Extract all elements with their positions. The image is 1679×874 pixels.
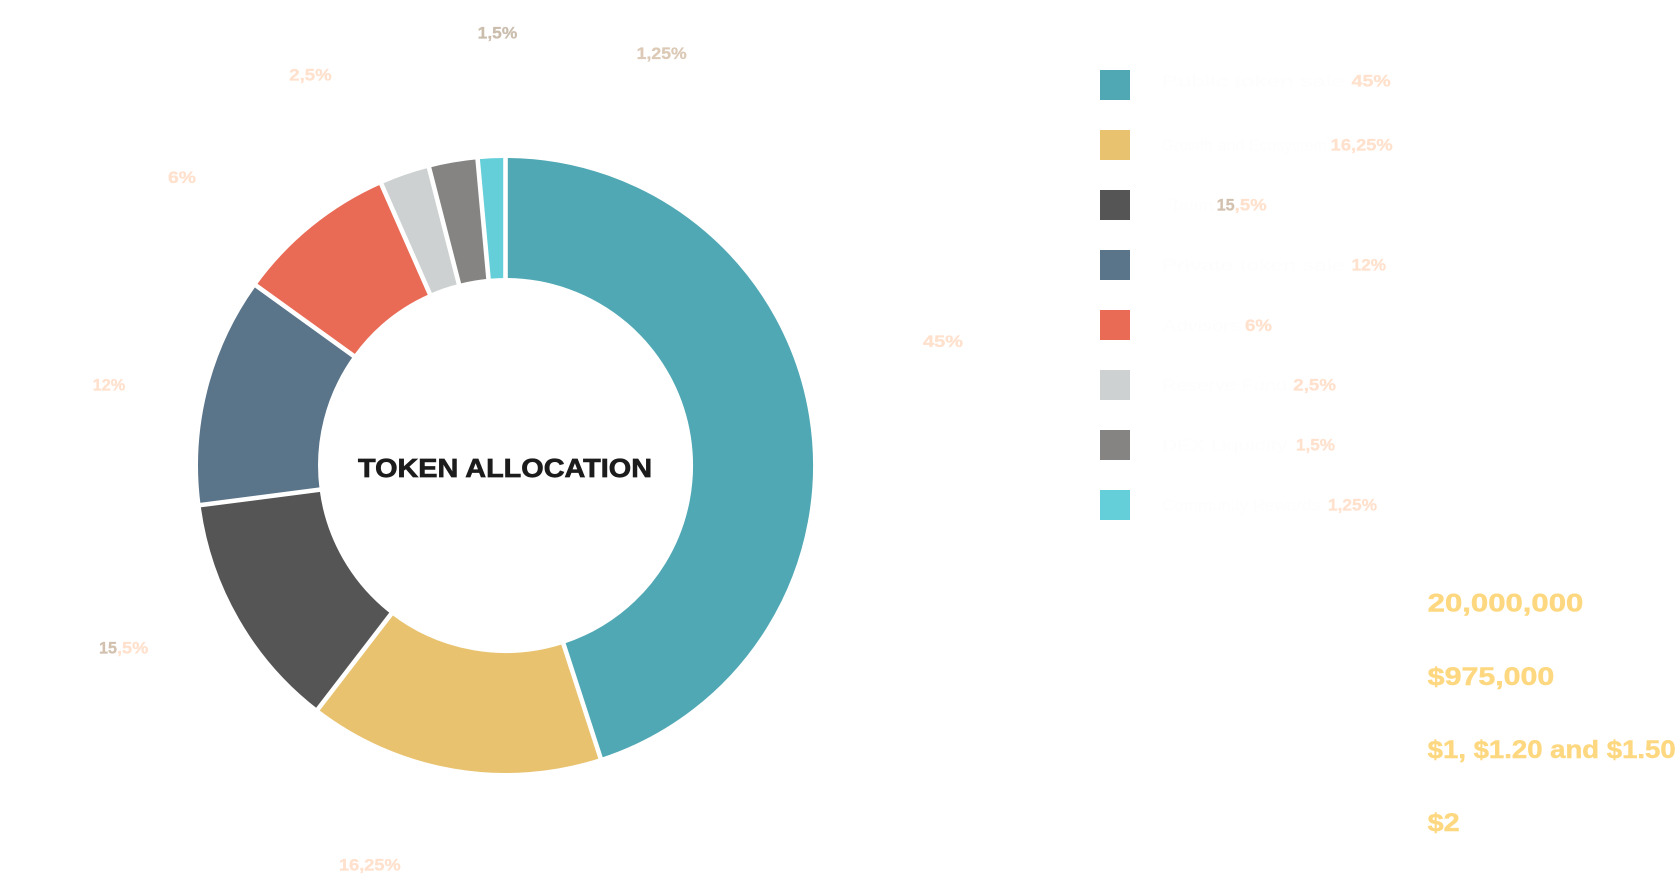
legend row: 2,5%: 2,5% bbox=[1293, 376, 1336, 395]
segment: 6% red bbox=[305, 239, 406, 321]
legend row: 1,25%: 1,25% bbox=[1328, 496, 1377, 515]
legend row: 15,5%: 15 bbox=[1217, 196, 1235, 215]
figure: 20,000,000: 20,000,000 bbox=[1428, 590, 1583, 618]
segment: 1,25% cyan bbox=[483, 218, 506, 219]
legend row: 1,5% bbox=[1100, 430, 1335, 460]
segment: 15,5% dark grey bbox=[260, 497, 354, 662]
legend row: 12%: Private token sale bbox=[1162, 258, 1345, 275]
callout: 6%: 6% bbox=[168, 168, 196, 187]
legend bbox=[1100, 70, 1393, 520]
legend row: 15,5% bbox=[1100, 190, 1267, 220]
legend row: 6%: 6% bbox=[1245, 316, 1272, 335]
legend row: 45%: 45% bbox=[1352, 72, 1391, 91]
donut callout labels bbox=[93, 23, 963, 874]
legend row: 16,25%: Growth and Ecosystem bbox=[1162, 138, 1327, 155]
legend row: 12%: 12% bbox=[1352, 256, 1386, 275]
callout: 1,25%: 1,25% bbox=[637, 44, 687, 63]
token sale key figures bbox=[1428, 590, 1676, 837]
callout: 15,5% bbox=[99, 638, 148, 657]
segment: 2,5% light grey bbox=[406, 226, 444, 239]
legend row: 6% bbox=[1100, 310, 1272, 340]
legend row: 1,25% bbox=[1100, 490, 1377, 520]
legend row: 45%: Public token sale bbox=[1162, 74, 1345, 91]
segment: 16,25% yellow bbox=[354, 662, 582, 713]
callout: 2,5%: 2,5% bbox=[289, 66, 332, 85]
legend row: 12% bbox=[1100, 250, 1386, 280]
figure: prices: $1, $1.20 and $1.50 bbox=[1428, 736, 1676, 764]
legend row: 1,5%: 1,5% bbox=[1296, 436, 1335, 455]
callout: 15,5%: 15 bbox=[99, 638, 117, 657]
callout: 45%: 45% bbox=[923, 332, 963, 351]
segment: 12% slate blue bbox=[258, 321, 305, 497]
callout: 1,5%: 1,5% bbox=[478, 23, 517, 42]
legend row: 6%: Advisors bbox=[1163, 318, 1240, 335]
segment: 45% teal bbox=[506, 218, 753, 701]
figure: $975,000: $975,000 bbox=[1428, 663, 1554, 691]
legend row: 2,5% bbox=[1100, 370, 1336, 400]
donut centre title: TOKEN ALLOCATION bbox=[358, 453, 652, 483]
figure: $2: $2 bbox=[1428, 809, 1460, 837]
legend row: 15,5%: Team bbox=[1170, 198, 1213, 215]
donut chart bbox=[198, 150, 753, 760]
segment: 1,5% grey bbox=[444, 219, 483, 226]
callout: 12%: 12% bbox=[93, 376, 125, 395]
legend row: 1,5%: DEX Liquidity bbox=[1162, 438, 1287, 455]
legend row: 1,25%: Community Rewards bbox=[1162, 498, 1320, 515]
legend row: 2,5%: Reserve Fund bbox=[1162, 378, 1287, 395]
legend row: 15,5%: ,5% bbox=[1235, 196, 1267, 215]
callout: 15,5%: ,5% bbox=[117, 638, 148, 657]
legend row: 16,25% bbox=[1100, 130, 1393, 160]
legend row: 16,25%: 16,25% bbox=[1331, 136, 1393, 155]
legend row: 45% bbox=[1100, 70, 1391, 100]
